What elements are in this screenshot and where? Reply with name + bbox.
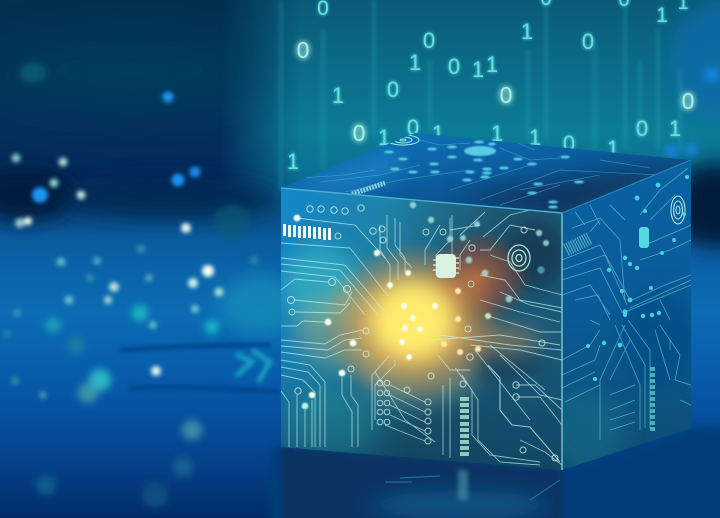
binary digits: 0 xyxy=(423,28,435,53)
glowing binary digits: 0 xyxy=(500,82,512,108)
binary digits: 1 xyxy=(332,83,344,108)
binary digits: 1 xyxy=(432,121,444,146)
binary digits: 1 xyxy=(472,57,484,82)
floor with cube reflection xyxy=(270,425,720,518)
right-face barcode xyxy=(566,238,590,250)
right-face chip xyxy=(639,227,649,248)
cube front face xyxy=(281,188,567,470)
binary digits: 0 xyxy=(448,54,460,79)
cube bright edges xyxy=(281,160,691,470)
glowing binary digits: 0 xyxy=(353,120,365,146)
binary digits: 1 xyxy=(521,19,533,44)
front-face ring pads xyxy=(288,205,558,461)
front-face solder dots xyxy=(294,215,491,409)
front-face barcode xyxy=(283,224,331,240)
binary digits: 0 xyxy=(636,116,648,141)
glowing binary digits: 0 xyxy=(682,88,694,114)
binary digits: 1 xyxy=(669,116,681,141)
blue lights behind cube xyxy=(666,68,719,157)
right-face circuit traces xyxy=(562,168,691,440)
glowing binary digits xyxy=(297,37,694,146)
binary digits: 1 xyxy=(656,4,668,27)
binary digits: 0 xyxy=(563,131,575,156)
top-face pads xyxy=(384,140,584,208)
binary digits: 1 xyxy=(491,121,503,146)
binary digits: 1 xyxy=(607,136,619,161)
front-face bar strip xyxy=(460,397,469,456)
binary digits: 1 xyxy=(529,125,541,150)
binary digits: 1 xyxy=(287,149,299,174)
front-face circuit traces xyxy=(281,210,562,465)
binary digits: 1 xyxy=(486,52,498,77)
binary rain light streaks xyxy=(281,0,680,190)
binary digits xyxy=(287,0,689,174)
bokeh lights: left field xyxy=(3,92,258,508)
binary digits: 0 xyxy=(387,77,399,102)
glowing binary digits: 0 xyxy=(297,37,309,63)
top-face barcode xyxy=(352,183,385,194)
binary digits: 1 xyxy=(378,125,390,150)
cube right face xyxy=(562,160,691,470)
front-face target xyxy=(508,245,530,271)
binary digits: 0 xyxy=(407,115,419,140)
right-face target xyxy=(671,196,685,224)
front-face chip xyxy=(433,254,459,278)
right-face bar strip xyxy=(650,367,655,431)
binary digits: 1 xyxy=(409,50,421,75)
binary digits: 0 xyxy=(582,29,594,54)
right-face dots xyxy=(586,175,689,381)
top-face target ring xyxy=(387,135,419,145)
cube top face xyxy=(281,133,690,215)
